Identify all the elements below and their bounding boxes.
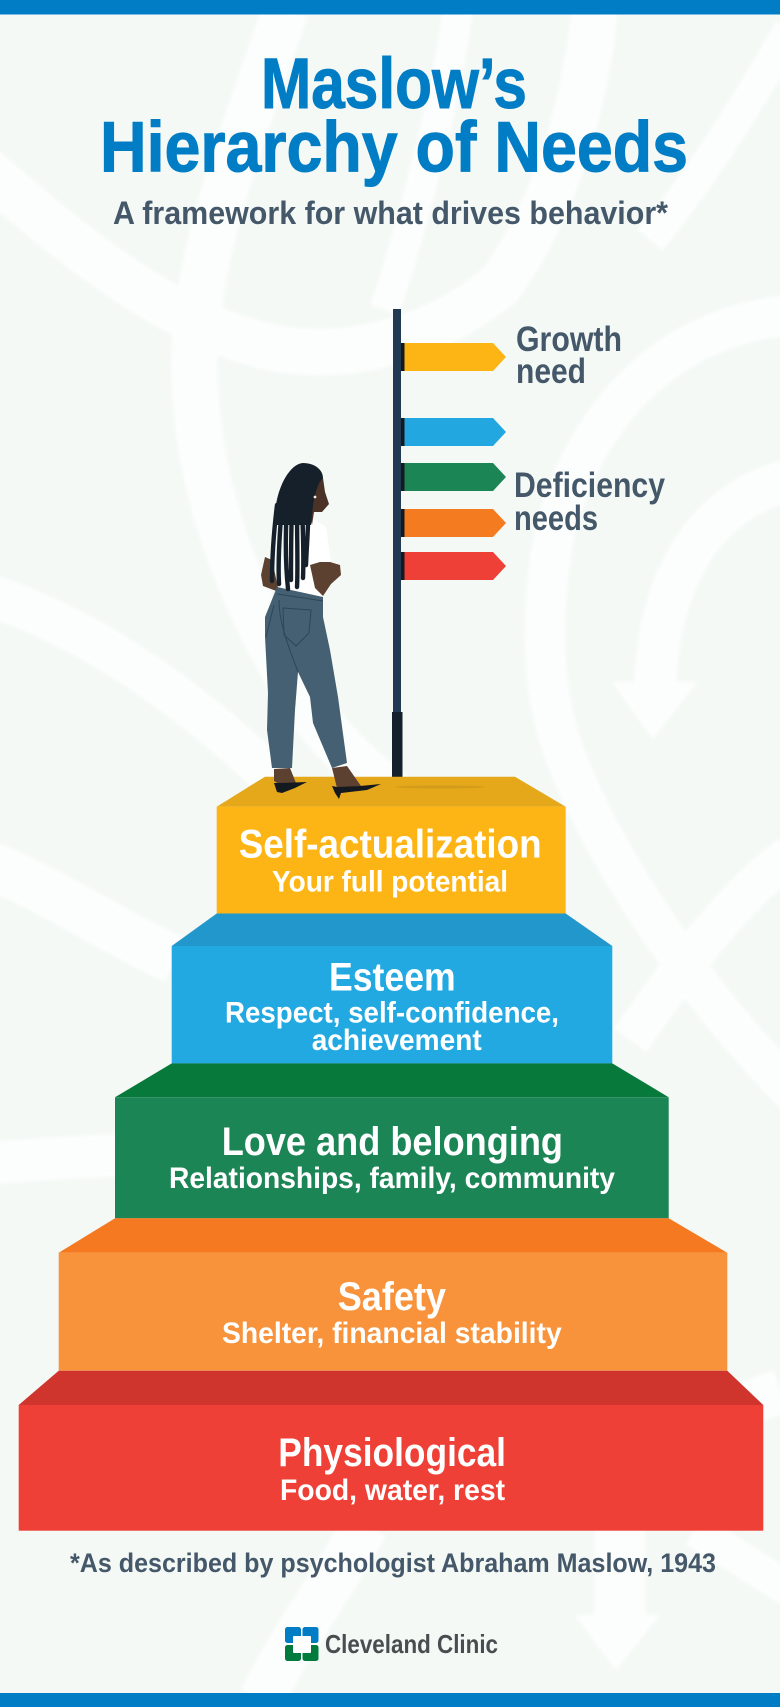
label: deficiency needs bbox=[514, 466, 665, 538]
step 5: physiological bbox=[19, 1371, 763, 1531]
title bbox=[100, 45, 688, 188]
label: growth need bbox=[516, 320, 622, 391]
subtitle: A framework for what drives behavior* bbox=[113, 195, 669, 231]
step 3: love and belonging: Love and belonging bbox=[222, 1120, 563, 1164]
label: deficiency needs: needs bbox=[514, 499, 598, 538]
step 1: self-actualization bbox=[217, 777, 566, 914]
step 4: safety: Safety bbox=[338, 1275, 447, 1319]
top bar bbox=[0, 0, 780, 14]
logo mark bbox=[285, 1627, 318, 1661]
pole base bbox=[392, 712, 402, 789]
bottom bar bbox=[0, 1693, 780, 1707]
step 1: self-actualization: Self-actualization bbox=[239, 823, 542, 867]
step 5: physiological: Food, water, rest bbox=[280, 1474, 505, 1507]
title: Hierarchy of Needs bbox=[100, 109, 688, 188]
logo wordmark: Cleveland Clinic bbox=[325, 1629, 498, 1659]
title: Maslow’s bbox=[261, 45, 527, 124]
pole bbox=[393, 309, 401, 713]
logo: Cleveland Clinic bbox=[285, 1627, 498, 1661]
right shoe bbox=[332, 784, 381, 799]
signpost bbox=[392, 309, 506, 789]
step 2: esteem bbox=[172, 914, 612, 1063]
step 4: safety bbox=[59, 1218, 727, 1371]
shirt bbox=[280, 518, 331, 598]
step 2: esteem: Respect, self-confidence, bbox=[225, 996, 559, 1029]
label: deficiency needs: Deficiency bbox=[514, 466, 665, 505]
earring bbox=[314, 496, 316, 498]
step 2: esteem: achievement bbox=[312, 1024, 482, 1057]
arrow sign: red bbox=[401, 552, 506, 580]
jeans pocket bbox=[283, 608, 311, 646]
woman standing on top step bbox=[261, 463, 381, 799]
step 4: safety: Shelter, financial stability bbox=[222, 1317, 562, 1350]
back arm bbox=[261, 557, 279, 592]
arrow sign: green bbox=[401, 463, 506, 491]
arrow sign: orange bbox=[401, 509, 506, 537]
step 3: love and belonging bbox=[115, 1063, 669, 1218]
step 2: esteem: Esteem bbox=[329, 956, 456, 1000]
step 5: physiological: Physiological bbox=[278, 1431, 506, 1475]
arrow sign: blue bbox=[401, 418, 506, 446]
arrow sign: growth, yellow bbox=[401, 343, 506, 371]
step 1: self-actualization: Your full potential bbox=[272, 866, 508, 899]
label: growth need: Growth bbox=[516, 320, 622, 359]
hair bbox=[272, 463, 323, 589]
step 3: love and belonging: Relationships, family, community bbox=[169, 1162, 615, 1195]
footnote: *As described by psychologist Abraham Maslow, 1943 bbox=[70, 1548, 716, 1578]
legs bbox=[274, 768, 296, 784]
jeans bbox=[265, 587, 347, 768]
waistband and seam bbox=[266, 594, 323, 672]
left shoe bbox=[274, 782, 307, 793]
hand and forearm bbox=[310, 562, 341, 596]
face bbox=[308, 470, 329, 525]
label: growth need: need bbox=[516, 352, 586, 391]
